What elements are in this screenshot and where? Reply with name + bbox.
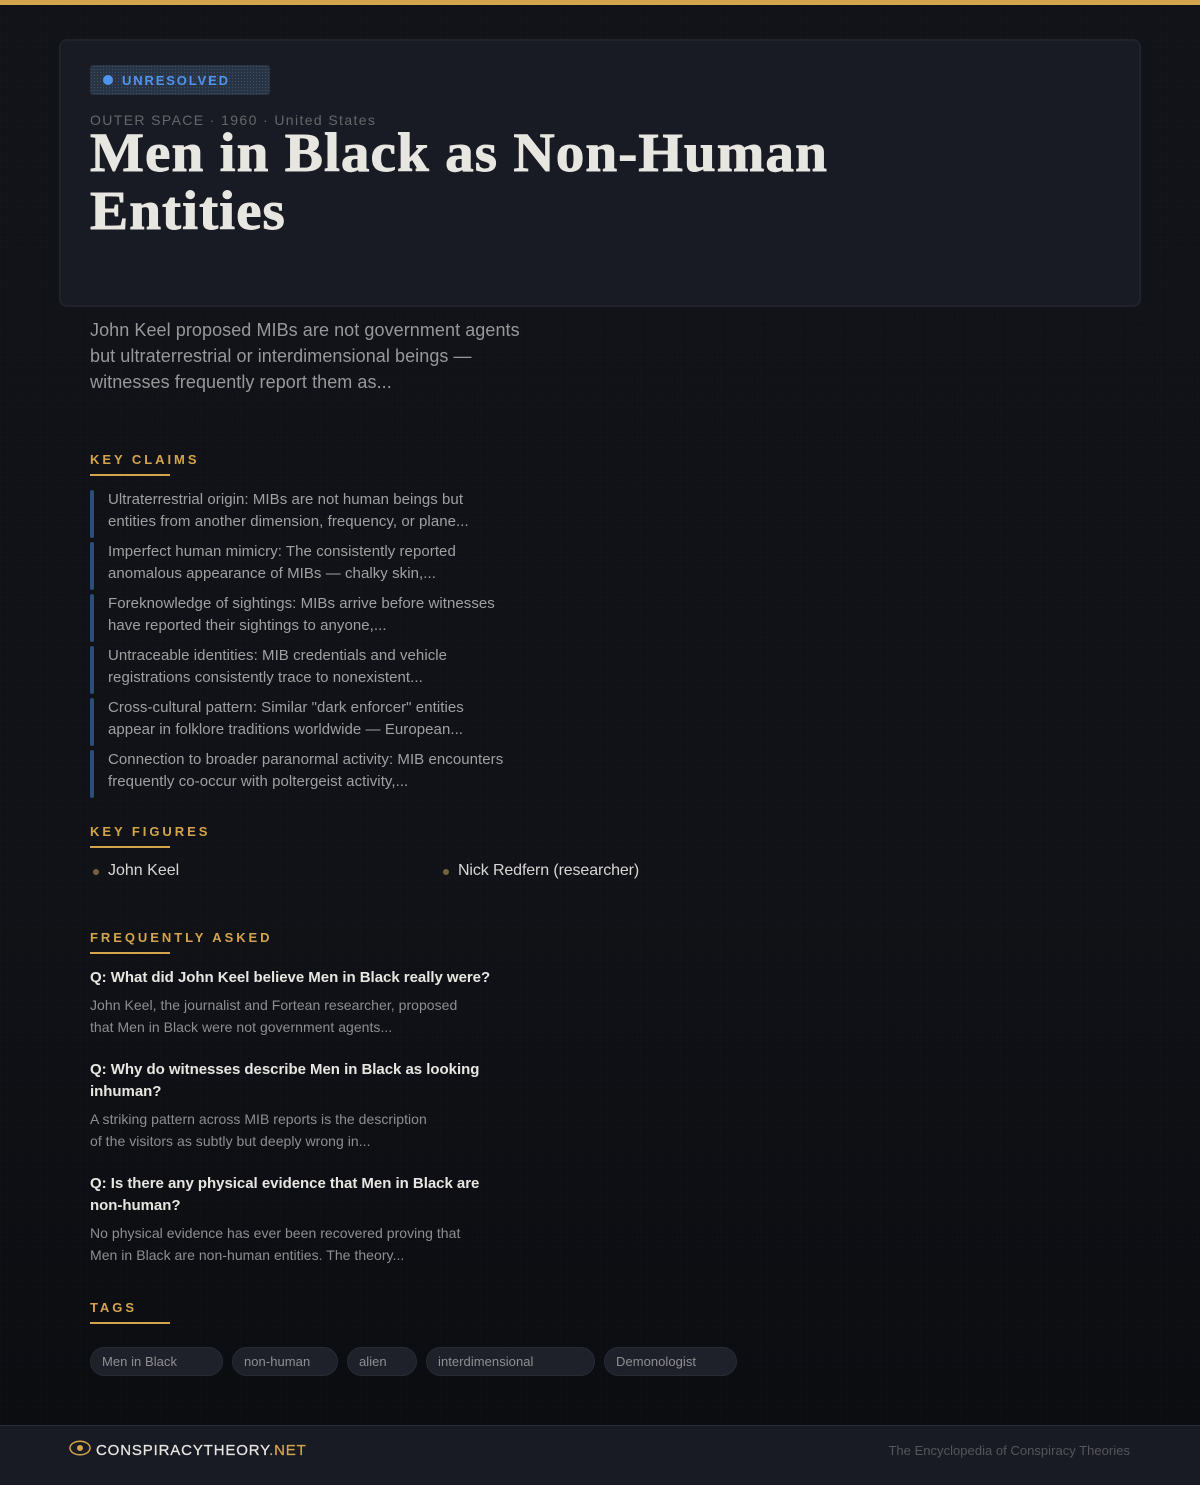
- tag: alien: [347, 1347, 417, 1376]
- tag: alien: alien: [359, 1354, 387, 1369]
- faq 1 answer: that Men in Black were not government agents...: [90, 1019, 392, 1035]
- claim 2: [90, 542, 456, 590]
- tag: interdimensional: interdimensional: [438, 1354, 533, 1369]
- title: Men in Black as Non-Human: [90, 122, 828, 183]
- faq 3 question: Q: Is there any physical evidence that Men in Black are: [90, 1175, 479, 1192]
- faq 2 question: Q: Why do witnesses describe Men in Black as looking: [90, 1061, 479, 1078]
- claim 2: anomalous appearance of MIBs — chalky skin,...: [108, 565, 436, 582]
- category and date line: OUTER SPACE · 1960 · United States: [90, 112, 376, 128]
- tag: Men in Black: [90, 1347, 223, 1376]
- claim 4: Untraceable identities: MIB credentials and vehicle: [108, 647, 447, 664]
- claim 6: [90, 750, 503, 798]
- faq 3 question: [90, 1175, 479, 1214]
- claim 1: [90, 490, 469, 538]
- claim 2: Imperfect human mimicry: The consistently reported: [108, 543, 456, 560]
- summary text: witnesses frequently report them as...: [90, 372, 392, 392]
- claim 6: Connection to broader paranormal activity: MIB encounters: [108, 751, 503, 768]
- title: Entities: [90, 180, 286, 241]
- top accent bar: [0, 0, 1200, 5]
- tag: Demonologist: Demonologist: [616, 1354, 696, 1369]
- tag: non-human: [232, 1347, 338, 1376]
- tag: Men in Black: Men in Black: [102, 1354, 177, 1369]
- status label: UNRESOLVED: [122, 73, 230, 88]
- faq 3 question: non-human?: [90, 1197, 181, 1214]
- tag: Demonologist: [604, 1347, 737, 1376]
- claim 5: Cross-cultural pattern: Similar "dark enforcer" entities: [108, 699, 464, 716]
- faq 3 answer: No physical evidence has ever been recovered proving that: [90, 1225, 460, 1241]
- faq 2 answer: [90, 1111, 427, 1149]
- footer tagline: The Encyclopedia of Conspiracy Theories: [888, 1443, 1130, 1458]
- faq 2 question: inhuman?: [90, 1083, 161, 1100]
- summary text: [90, 320, 520, 392]
- title: [90, 122, 828, 241]
- status badge: unresolved: [90, 65, 270, 95]
- faq 2 answer: A striking pattern across MIB reports is the description: [90, 1111, 427, 1127]
- summary text: John Keel proposed MIBs are not government agents: [90, 320, 520, 340]
- claim 4: [90, 646, 447, 694]
- heading: frequently asked: FREQUENTLY ASKED: [90, 930, 273, 945]
- claim 3: [90, 594, 495, 642]
- heading: tags: TAGS: [90, 1300, 137, 1315]
- figure: Nick Redfern: Nick Redfern (researcher): [458, 862, 639, 879]
- panel: header card: [59, 39, 1141, 307]
- claim 4: registrations consistently trace to nonexistent...: [108, 669, 423, 686]
- claim 5: [90, 698, 464, 746]
- claim 5: appear in folklore traditions worldwide — European...: [108, 721, 463, 738]
- footer: [0, 1425, 1200, 1485]
- heading: key figures: KEY FIGURES: [90, 824, 210, 839]
- claim list: [90, 490, 503, 798]
- claim 3: Foreknowledge of sightings: MIBs arrive before witnesses: [108, 595, 495, 612]
- heading: key claims: KEY CLAIMS: [90, 452, 199, 467]
- figure: John Keel: John Keel: [108, 862, 179, 879]
- logo wordmark: CONSPIRACYTHEORY.NET: [96, 1442, 307, 1459]
- faq 3 answer: Men in Black are non-human entities. The theory...: [90, 1247, 404, 1263]
- tag: non-human: non-human: [244, 1354, 310, 1369]
- faq 1 answer: John Keel, the journalist and Fortean researcher, proposed: [90, 997, 457, 1013]
- status dot: [103, 75, 113, 85]
- claim 6: frequently co-occur with poltergeist activity,...: [108, 773, 408, 790]
- tag: interdimensional: [426, 1347, 595, 1376]
- faq 1 answer: [90, 997, 457, 1035]
- faq 3 answer: [90, 1225, 460, 1263]
- icon: eye logo: [69, 1440, 91, 1456]
- claim 3: have reported their sightings to anyone,...: [108, 617, 387, 634]
- faq 2 answer: of the visitors as subtly but deeply wrong in...: [90, 1133, 371, 1149]
- claim 1: entities from another dimension, frequency, or plane...: [108, 513, 469, 530]
- summary text: but ultraterrestrial or interdimensional beings —: [90, 346, 472, 366]
- claim 1: Ultraterrestrial origin: MIBs are not human beings but: [108, 491, 463, 508]
- faq 1 question: Q: What did John Keel believe Men in Black really were?: [90, 969, 490, 986]
- faq 2 question: [90, 1061, 479, 1100]
